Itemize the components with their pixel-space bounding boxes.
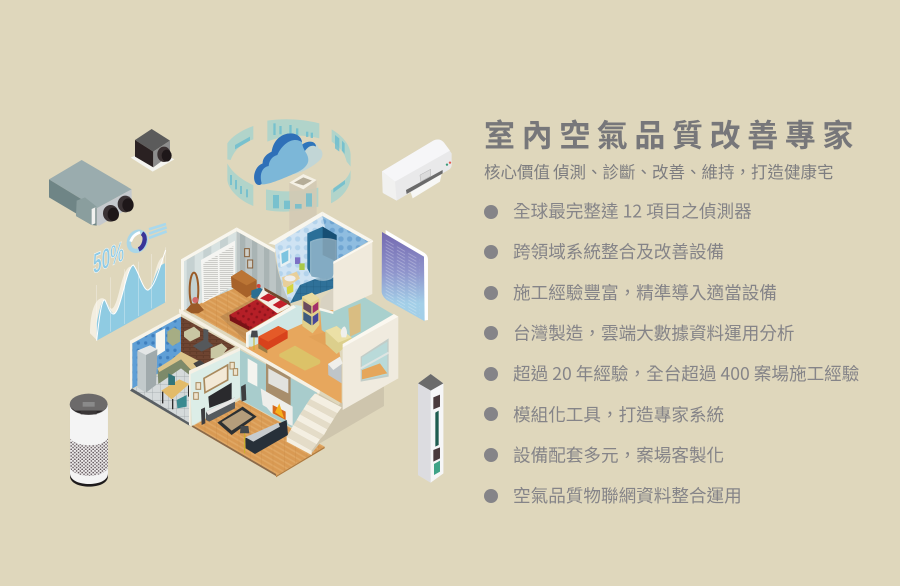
item 6: 模組化工具，打造專家系統 (513, 405, 724, 425)
icon: air conditioner (382, 140, 452, 201)
speakers (241, 384, 246, 402)
bookshelf (302, 293, 319, 333)
chart label: 50%: 50% (93, 236, 124, 281)
stairs (287, 393, 342, 455)
item 8: 空氣品質物聯網資料整合運用 (513, 486, 742, 506)
feature list (484, 198, 859, 506)
icon: ventilation unit (49, 160, 134, 226)
lower cabinets (158, 359, 192, 384)
fridge (137, 345, 157, 393)
chimney (289, 174, 317, 233)
drawers (325, 326, 352, 354)
upper floor bedroom (181, 227, 297, 345)
icon: sensor box (131, 129, 174, 172)
big cloud (255, 134, 308, 184)
wardrobe (201, 241, 235, 303)
icon: air purifier (70, 394, 108, 487)
foundation shadow (320, 387, 384, 443)
chart: air quality area chart (90, 247, 166, 341)
illustration: isometric house (130, 212, 398, 477)
subtitle: 核心價值偵測、診斷、改善、維持，打造健康宅 (484, 163, 834, 182)
icon: data screen (382, 230, 428, 321)
title: 室內空氣品質改善專家 (484, 118, 860, 154)
bathroom (268, 212, 372, 312)
kitchen (130, 313, 235, 426)
kitchenette (328, 357, 342, 383)
icon: cloud data ring (227, 119, 351, 233)
item 5: 超過20年經驗，全台超過400案場施工經驗 (513, 361, 859, 386)
bed (220, 293, 293, 343)
fireplace (266, 363, 291, 407)
wall cabinet (167, 327, 180, 346)
item 7: 設備配套多元，案場客製化 (513, 446, 724, 466)
cream wall with window (333, 240, 398, 410)
ring bars (230, 123, 345, 209)
lower floor wood (192, 400, 325, 476)
beam between floors (179, 309, 320, 394)
upper floor living area (246, 291, 394, 403)
tv (208, 383, 232, 408)
ring panels (227, 119, 351, 212)
item 3: 施工經驗豐富，精準導入適當設備 (513, 283, 777, 303)
counter (157, 352, 203, 372)
nightstand (251, 287, 264, 300)
item 4: 台灣製造，雲端大數據資料運用分析 (513, 324, 795, 344)
small cloud (289, 143, 322, 174)
picture frames (204, 365, 228, 393)
living room walls (189, 347, 317, 454)
dining table (161, 379, 189, 399)
window (156, 328, 165, 357)
red sofa (258, 326, 288, 350)
item 2: 跨領域系統整合及改善設備 (513, 242, 724, 262)
coffee table (217, 407, 257, 435)
chart: donut (126, 229, 149, 254)
item 1: 全球最完整達12項目之偵測器 (513, 198, 752, 224)
hood (193, 328, 213, 352)
mirror (186, 273, 204, 313)
picture frames (245, 249, 249, 257)
lamp (251, 331, 258, 350)
chart: legend lines (149, 224, 167, 238)
icon: tower sensor (418, 374, 443, 483)
sofa (245, 420, 288, 454)
dresser (231, 270, 257, 298)
rug (279, 346, 320, 371)
window (248, 358, 257, 387)
floor lamp (240, 426, 249, 453)
